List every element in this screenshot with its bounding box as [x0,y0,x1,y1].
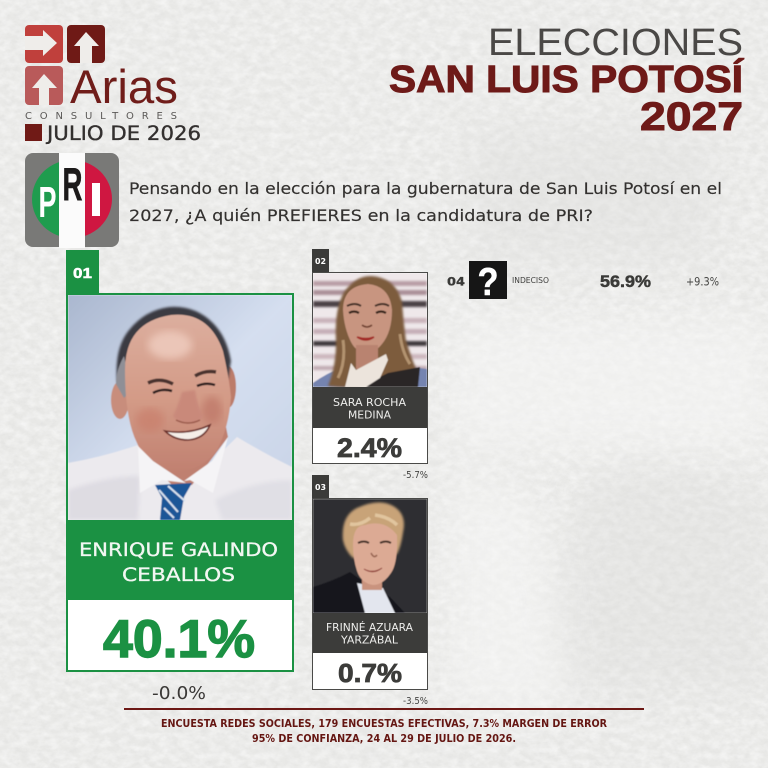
change +9.3%: +9.3% [686,274,719,288]
panel: candidate 03 [312,475,428,690]
rank tab 02 [312,249,329,273]
logo tagline: CONSULTORES [25,111,177,122]
rank tab 01: 01 [73,265,92,282]
icon: logo arrow squares [25,25,105,105]
footnote: 95% DE CONFIANZA, 24 AL 29 DE JULIO DE 2026. [252,732,516,745]
change: candidate 03: -3.5% [403,696,428,707]
rank tab 03 [312,475,329,499]
logo wordmark: Arias [70,60,178,113]
value 40.1%: 40.1% [103,610,255,669]
footnote: ENCUESTA REDES SOCIALES, 179 ENCUESTAS EFECTIVAS, 7.3% MARGEN DE ERROR [161,717,607,730]
value 0.7%: 0.7% [338,658,402,688]
title [389,22,745,139]
icon: PRI party logo: R [62,158,82,210]
row: candidate 04 undecided [447,261,719,304]
rank 04: 04 [447,274,465,288]
photo: Frinné Azuara [313,499,427,613]
footer rule [124,708,644,710]
card frame [312,498,428,690]
panel: candidate 01 [66,250,293,671]
icon: PRI party logo [25,153,119,248]
photo: Sara Rocha [313,273,427,387]
name band: CEBALLOS [122,564,235,586]
title: ELECCIONES [488,22,743,64]
name band: SARA ROCHA [333,397,407,409]
panel: candidate 02 [312,249,428,464]
name band: FRINNÉ AZUARA [326,621,414,634]
icon: PRI party logo: P [38,178,56,227]
logo: Arias Consultores [25,25,178,122]
rank tab 02: 02 [315,257,326,266]
footnote [161,717,607,745]
name band: YARZÁBAL [340,634,398,646]
change: candidate 02: -5.7% [403,470,428,481]
rank tab 03: 03 [315,483,326,492]
icon: question mark: ? [478,261,498,304]
title: 2027 [640,95,743,139]
card frame [67,294,293,671]
icon: question mark [469,261,507,304]
question text: 2027, ¿A quién PREFIERES en la candidatura de PRI? [129,206,593,225]
change: candidate 01: -0.0% [152,683,206,704]
title: SAN LUIS POTOSÍ [389,57,745,101]
rank tab 01 [66,250,99,294]
value 2.4%: 2.4% [337,433,402,463]
question text [129,179,722,225]
name band [313,613,427,653]
question text: Pensando en la elección para la gubernatura de San Luis Potosí en el [129,179,722,198]
name band [313,387,427,428]
photo: Enrique Galindo [68,295,292,520]
date: julio de 2026: JULIO DE 2026 [45,122,201,145]
name band: ENRIQUE GALINDO [79,539,278,561]
name band [68,520,292,600]
label indeciso: INDECISO [512,276,549,285]
value 56.9%: 56.9% [600,272,651,291]
name band: MEDINA [348,410,392,422]
card frame [312,272,428,464]
